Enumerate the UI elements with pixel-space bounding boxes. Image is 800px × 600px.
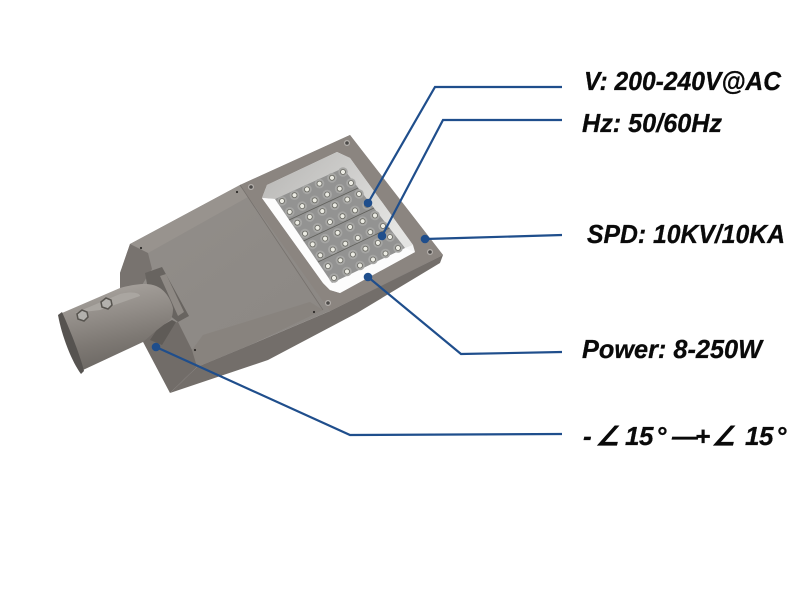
label: power: Power: 8-250W	[582, 334, 764, 364]
label: tilt angle: -∠15°—+∠15°	[583, 421, 787, 451]
lower left facet	[142, 322, 197, 393]
label: surge protection: SPD: 10KV/10KA	[587, 219, 785, 249]
lower side strip	[170, 255, 443, 393]
head plate	[240, 135, 443, 311]
plate screws	[249, 141, 432, 305]
clamp detail	[150, 320, 176, 345]
body lower bevel	[192, 302, 323, 367]
pole mount arm	[58, 284, 173, 374]
LED module panel	[275, 168, 405, 283]
arm highlight	[75, 293, 140, 313]
arm flange	[58, 312, 84, 374]
street light product illustration	[58, 135, 443, 393]
LED window recess	[262, 152, 415, 293]
plate seam	[240, 185, 323, 310]
LED module seams	[289, 188, 390, 262]
label: frequency: Hz: 50/60Hz	[582, 108, 722, 138]
label: voltage: V: 200-240V@AC	[584, 66, 782, 96]
callout anchor dots	[152, 199, 429, 351]
arm tube	[62, 284, 173, 370]
window lower bevel	[262, 198, 415, 293]
mounting pocket	[145, 267, 189, 322]
luminaire body top surface	[120, 135, 443, 367]
body upper bevel	[130, 185, 248, 253]
left end facet	[120, 244, 152, 300]
callout leader lines	[156, 87, 562, 435]
body rivets	[140, 191, 315, 351]
window upper bevel	[262, 152, 413, 248]
LED array	[277, 167, 403, 283]
arm bolts	[77, 298, 112, 321]
pocket inner	[160, 274, 184, 316]
